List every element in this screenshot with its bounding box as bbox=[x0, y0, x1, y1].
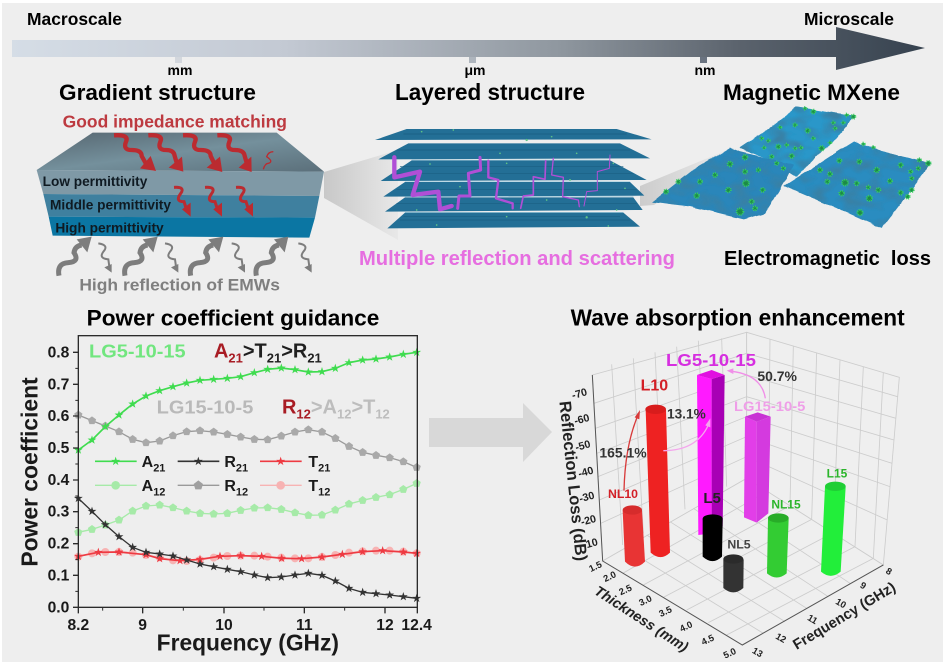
annotation: R12 greater than A12 greater than T12: >A bbox=[311, 397, 337, 419]
reflection loss tick labels: -70 bbox=[571, 386, 589, 402]
heading: power coefficient guidance: Power coefficient guidance bbox=[87, 305, 379, 330]
y axis tick labels: 0.1 bbox=[48, 567, 70, 584]
y axis tick labels: 0.0 bbox=[48, 599, 70, 616]
x axis tick labels: 11 bbox=[296, 617, 313, 634]
heading: wave absorption enhancement: Wave absorption enhancement bbox=[571, 304, 905, 330]
heading: Magnetic MXene: Magnetic MXene bbox=[723, 80, 900, 105]
legend: 12 bbox=[153, 487, 165, 499]
x axis tick labels: 9 bbox=[138, 617, 147, 634]
connector wedge: gradient to layered bbox=[324, 150, 398, 240]
tick label: nm: nm bbox=[694, 62, 716, 78]
label: LG5-10-15: LG5-10-15 bbox=[666, 350, 756, 370]
thickness tick labels: 3.0 bbox=[637, 593, 653, 608]
annotation: A21 greater than T21 greater than R21: A bbox=[214, 341, 228, 363]
reflection loss tick labels: -30 bbox=[578, 490, 596, 505]
thickness tick labels: 4.0 bbox=[678, 619, 694, 634]
heading: Layered structure: Layered structure bbox=[395, 79, 585, 105]
curve: T21 bbox=[78, 551, 417, 561]
icon: purple zigzag wave paths bbox=[394, 155, 610, 209]
curve: A12 bbox=[78, 483, 417, 532]
tick label: um: μm bbox=[464, 62, 486, 78]
thickness tick labels: 1.5 bbox=[587, 559, 603, 574]
annotation: A21 greater than T21 greater than R21: >T bbox=[243, 341, 267, 363]
reflection loss tick labels: -40 bbox=[577, 465, 595, 480]
y axis tick labels: 0.7 bbox=[48, 376, 70, 393]
frequency tick labels: 13 bbox=[750, 645, 764, 659]
annotation: A21 greater than T21 greater than R21: 21 bbox=[228, 350, 243, 365]
x axis tick labels: 12.4 bbox=[401, 617, 432, 634]
x axis title: Frequency (GHz) bbox=[157, 630, 339, 656]
bar: LG5-10-15 bbox=[697, 370, 725, 535]
icon: transmitted red wave arrows bbox=[174, 187, 253, 217]
label: Microscale: Microscale bbox=[804, 9, 894, 29]
curve: R12 bbox=[78, 415, 417, 467]
thickness tick labels: 3.5 bbox=[657, 604, 673, 619]
y axis tick labels bbox=[48, 344, 70, 616]
label: Macroscale: Macroscale bbox=[27, 9, 122, 29]
legend: 12 bbox=[318, 487, 330, 499]
label: high reflection of EMWs: High reflection of EMWs bbox=[79, 276, 280, 295]
axis title: thickness: Thickness (mm) bbox=[591, 583, 691, 656]
cylinder: L10 bbox=[645, 405, 670, 557]
annotation: A21 greater than T21 greater than R21: 21 bbox=[267, 350, 281, 365]
arrow: chart to chart bbox=[429, 403, 552, 462]
tick label: mm: mm bbox=[168, 62, 192, 78]
connector wedge: layered to MXene bbox=[640, 146, 737, 206]
frequency tick labels bbox=[750, 566, 894, 659]
label: good impedance matching: Good impedance matching bbox=[63, 111, 287, 131]
reflection loss tick labels: -50 bbox=[574, 438, 592, 454]
icon: reflected grey wave arrows bbox=[59, 237, 312, 276]
value: 13.1%: 13.1% bbox=[667, 406, 706, 421]
legend: A bbox=[142, 454, 153, 471]
frequency tick labels: 12 bbox=[774, 631, 788, 645]
y axis tick labels: 0.5 bbox=[48, 440, 70, 457]
cylinder: NL10 bbox=[623, 505, 645, 567]
frequency tick labels: 9 bbox=[858, 580, 868, 591]
legend: 21 bbox=[153, 463, 165, 475]
frequency tick labels: 10 bbox=[834, 596, 848, 610]
x axis tick labels: 8.2 bbox=[67, 617, 90, 634]
thickness tick labels bbox=[587, 559, 738, 661]
frequency tick labels: 11 bbox=[806, 613, 819, 626]
value: 50.7%: 50.7% bbox=[757, 368, 798, 384]
thickness tick labels: 2.0 bbox=[602, 569, 618, 584]
y axis tick labels: 0.3 bbox=[48, 504, 70, 521]
y axis title: Power coefficient bbox=[17, 377, 43, 567]
label: electromagnetic loss: Electromagnetic loss bbox=[724, 248, 931, 270]
annotation: A21 greater than T21 greater than R21: 21 bbox=[307, 350, 322, 365]
label: L15: L15 bbox=[827, 466, 848, 480]
axis title: frequency: Frequency (GHz) bbox=[790, 580, 899, 653]
label: LG15-10-5: LG15-10-5 bbox=[734, 399, 806, 414]
label: NL5: NL5 bbox=[727, 537, 751, 551]
cylinder: NL15 bbox=[767, 513, 789, 577]
annotation: R12 greater than A12 greater than T12: 12 bbox=[337, 406, 351, 421]
y axis tick labels: 0.6 bbox=[48, 408, 70, 425]
cylinder: L15 bbox=[821, 482, 846, 576]
arrow: LG15-10-5 to LG5-10-15 bbox=[727, 368, 765, 398]
legend: T bbox=[308, 454, 318, 471]
bar: LG15-10-5 bbox=[744, 412, 771, 523]
legend: R bbox=[224, 478, 236, 495]
heading: Gradient structure: Gradient structure bbox=[59, 80, 256, 105]
label: high permittivity: High permittivity bbox=[55, 221, 164, 236]
frequency tick labels: 8 bbox=[884, 566, 894, 577]
cylinder: L5 bbox=[703, 514, 723, 561]
panel: magnetic MXene sheets bbox=[653, 107, 932, 228]
legend: T bbox=[308, 478, 318, 495]
3D axes box bbox=[592, 332, 899, 645]
label: LG15-10-5: LG15-10-5 bbox=[157, 396, 253, 417]
annotation: R12 greater than A12 greater than T12: >T bbox=[351, 397, 375, 419]
thickness tick labels: 2.5 bbox=[617, 583, 633, 597]
panel: power coefficient chart bbox=[17, 305, 432, 656]
annotation: R12 greater than A12 greater than T12: 12 bbox=[375, 406, 390, 421]
label: multiple reflection and scattering: Multiple reflection and scattering bbox=[359, 248, 675, 270]
panel: gradient structure block bbox=[37, 111, 324, 295]
x axis tick labels bbox=[67, 617, 432, 634]
panel: layered structure sheets bbox=[375, 129, 652, 228]
legend: 12 bbox=[236, 487, 248, 499]
label: L5: L5 bbox=[703, 490, 721, 507]
value: 165.1%: 165.1% bbox=[599, 444, 647, 460]
legend: R bbox=[224, 454, 236, 471]
scale arrow bbox=[12, 27, 925, 70]
label: NL15: NL15 bbox=[771, 497, 801, 511]
y axis tick labels: 0.8 bbox=[48, 344, 70, 361]
label: middle permittivity: Middle permittivity bbox=[50, 198, 171, 213]
legend: 21 bbox=[236, 463, 248, 475]
y axis tick labels: 0.4 bbox=[48, 472, 70, 489]
x axis tick labels: 10 bbox=[215, 617, 233, 634]
curve: T12 bbox=[78, 551, 417, 561]
reflection loss tick labels bbox=[571, 386, 599, 552]
axis title: reflection loss: Reflection Loss (dB) bbox=[555, 400, 591, 562]
x axis tick labels: 12 bbox=[376, 617, 394, 634]
y axis tick labels: 0.2 bbox=[48, 536, 70, 553]
annotation: R12 greater than A12 greater than T12: R bbox=[282, 397, 297, 419]
legend: 21 bbox=[318, 463, 330, 475]
reflection loss tick labels: -10 bbox=[581, 536, 599, 552]
arrow: L10 to LG5-10-15 bbox=[663, 418, 710, 451]
arrow: NL10 to L10 bbox=[624, 410, 640, 491]
legend: A bbox=[142, 478, 153, 495]
label: NL10: NL10 bbox=[608, 487, 638, 501]
label: low permittivity: Low permittivity bbox=[43, 174, 148, 189]
cylinder: NL5 bbox=[723, 554, 744, 592]
panel: reflection loss 3D chart bbox=[555, 304, 905, 661]
curve: R21 bbox=[78, 498, 417, 598]
thickness tick labels: 4.5 bbox=[700, 633, 716, 647]
curve: A21 bbox=[78, 352, 417, 450]
label: LG5-10-15: LG5-10-15 bbox=[89, 340, 186, 361]
reflection loss tick labels: -20 bbox=[580, 513, 598, 529]
icon: incoming red wave arrows bbox=[114, 135, 273, 172]
reflection loss tick labels: -60 bbox=[573, 412, 591, 428]
icon: magnetic particles bbox=[664, 107, 931, 215]
legend bbox=[95, 454, 330, 499]
thickness tick labels: 5.0 bbox=[722, 646, 738, 661]
chart frame and ticks bbox=[73, 336, 417, 613]
annotation: R12 greater than A12 greater than T12: 12 bbox=[296, 406, 311, 421]
annotation: A21 greater than T21 greater than R21: >R bbox=[281, 341, 308, 363]
label: L10: L10 bbox=[641, 378, 668, 395]
